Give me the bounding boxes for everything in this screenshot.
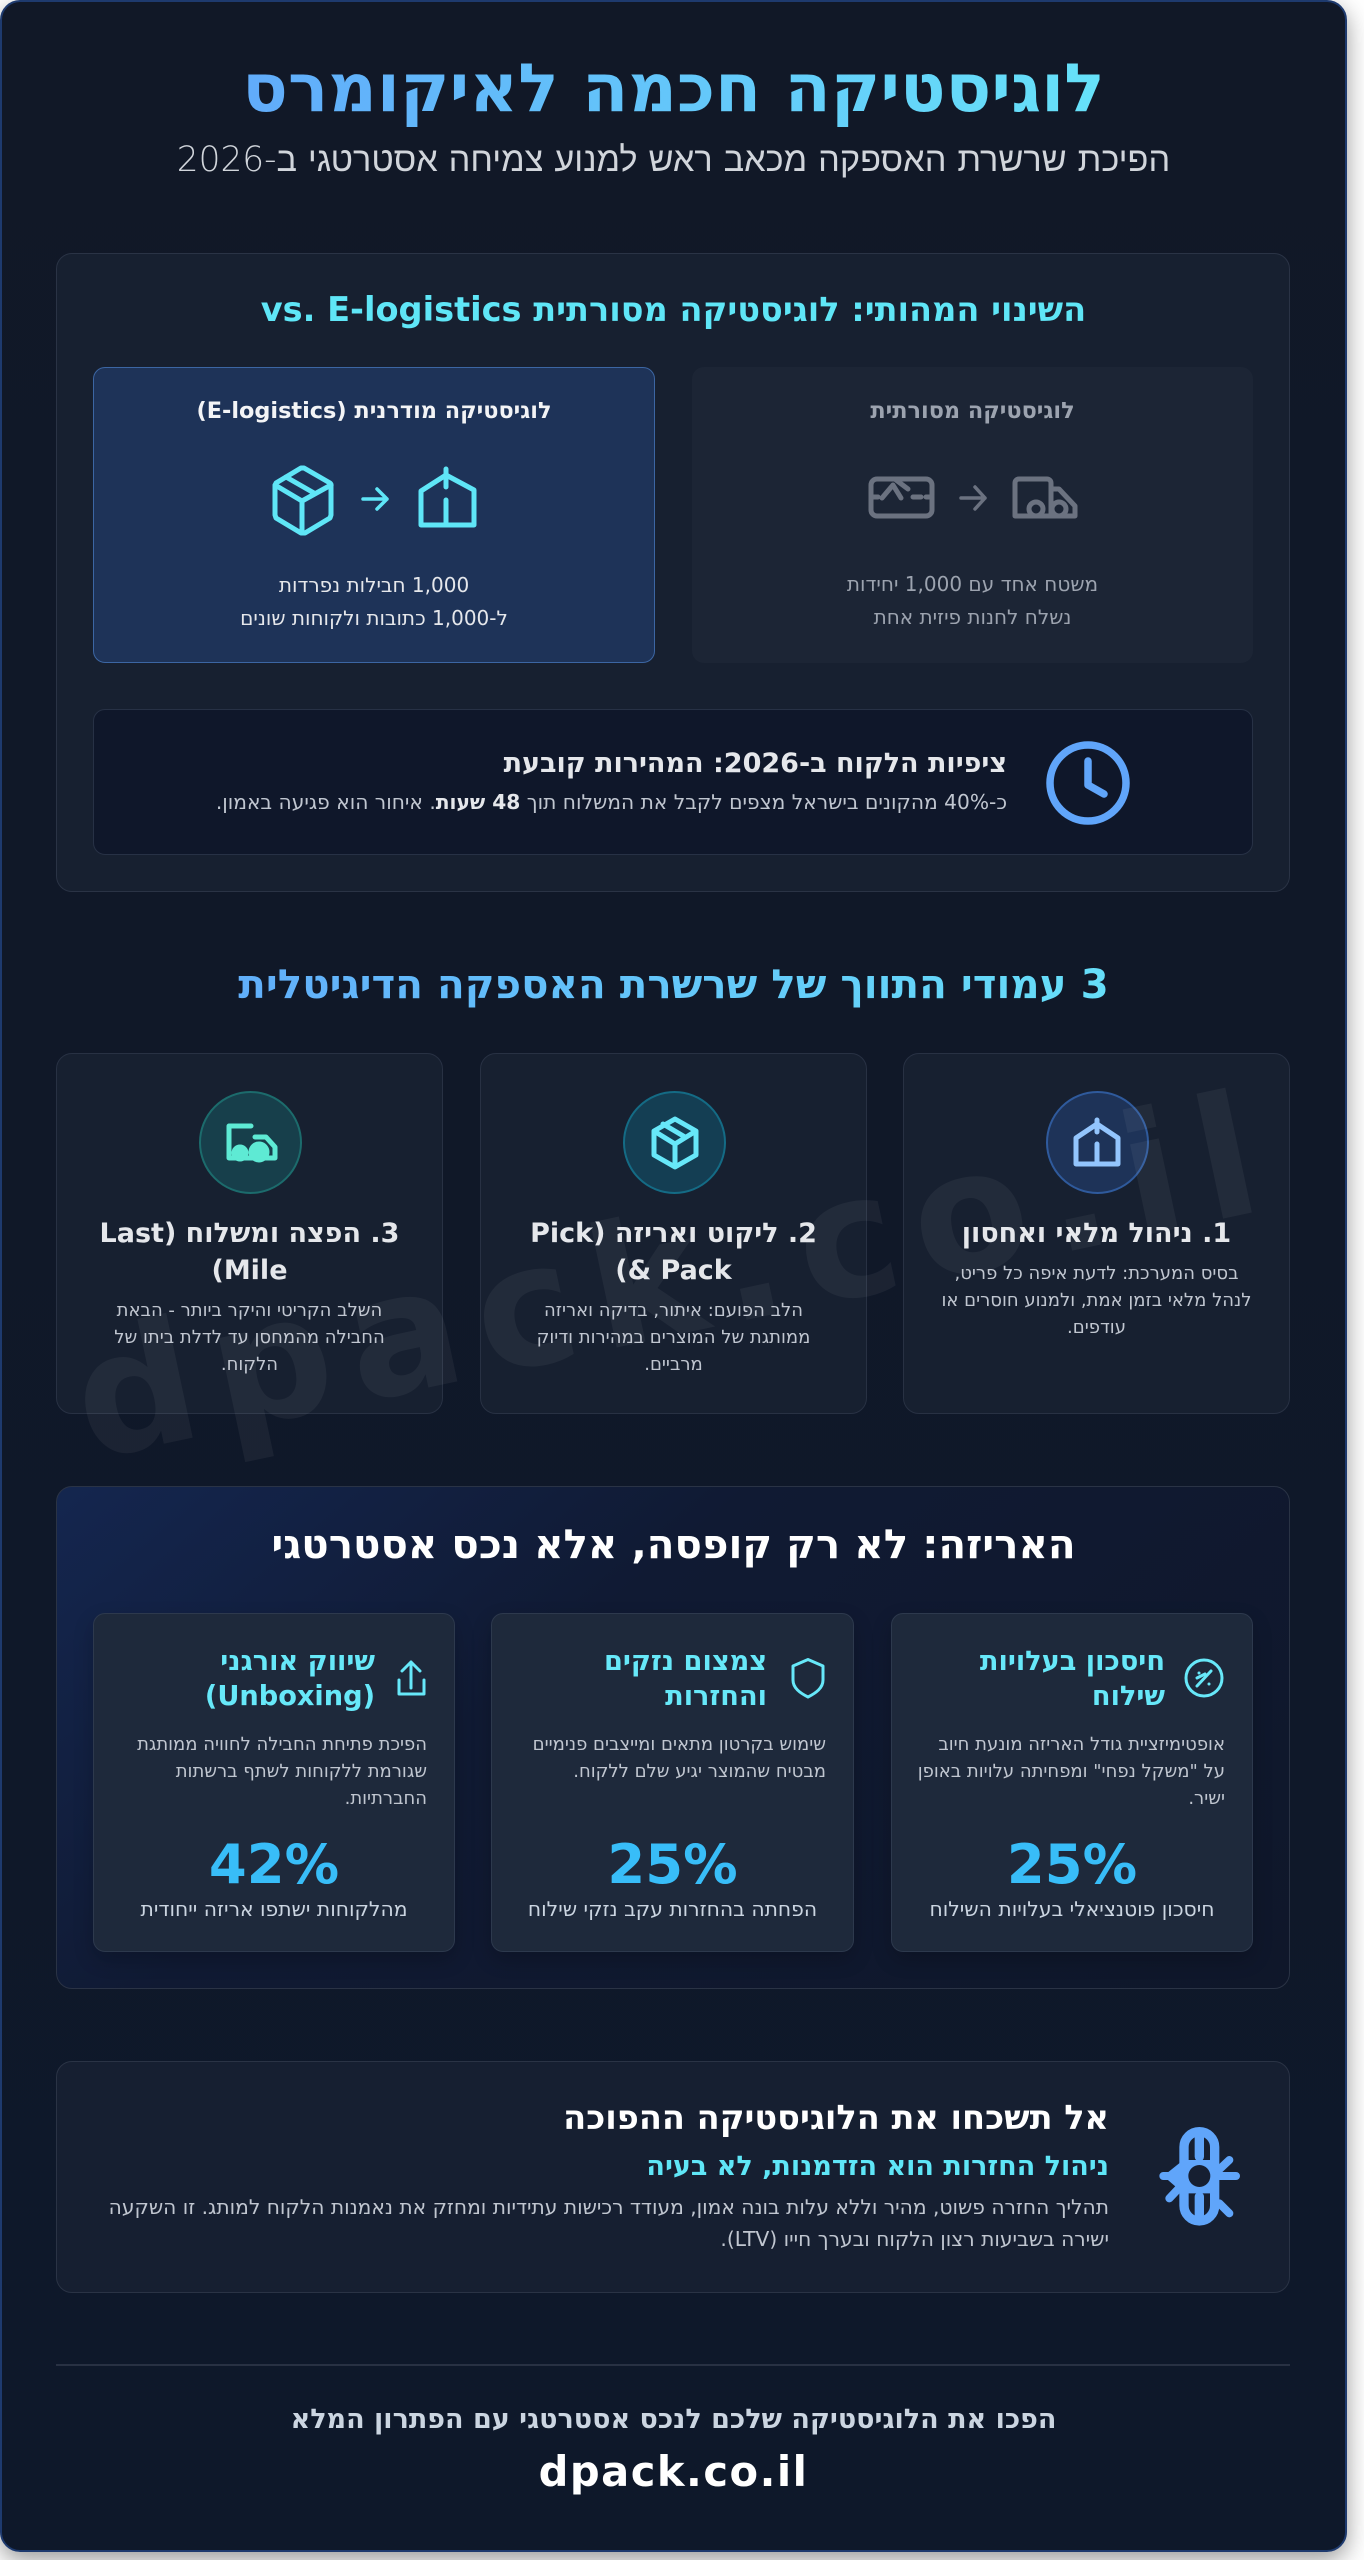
icon: returns emblem: [1159, 2127, 1240, 2226]
heading: three pillars: 3 עמודי התווך של שרשרת האספקה הדיגיטלית: [238, 960, 1109, 1008]
pillar 3 heading: 3. הפצה ומשלוח (Last Mile): [100, 1218, 399, 1286]
stat label: הפחתה בהחזרות עקב נזקי שילוח: [528, 1897, 817, 1921]
organic marketing heading: שיווק אורגני (Unboxing): [205, 1646, 375, 1712]
pillar 1: inventory: [903, 1053, 1290, 1414]
modern description: 1,000 חבילות נפרדות: [279, 573, 469, 597]
organic marketing text: הפיכת פתיחת החבילה לחוויה ממותגת שגורמת ללקוחות לשתף ברשתות החברתיות.: [137, 1734, 427, 1809]
card: shipping cost savings: [891, 1613, 1253, 1952]
title: [140, 42, 1207, 134]
card: damage reduction: [491, 1613, 854, 1952]
pillar 2 heading: 2. ליקוט ואריזה (Pick & Pack): [530, 1218, 817, 1286]
traditional icons: [868, 476, 1078, 518]
heading: packaging as asset: האריזה: לא רק קופסה, אלא נכס אסטרטגי: [271, 1520, 1076, 1568]
stat 25%: 25%: [1007, 1833, 1137, 1896]
reverse logistics subheading: ניהול החזרות הוא הזדמנות, לא בעיה: [646, 2151, 1109, 2182]
damage reduction text: שימוש בקרטון מתאים ומייצבים פנימיים מבטיח שהמוצר יגיע שלם ללקוח.: [533, 1734, 826, 1782]
heading: core change: השינוי המהותי: לוגיסטיקה מסורתית vs. E-logistics: [261, 290, 1086, 329]
panel: reverse logistics: [56, 2061, 1290, 2293]
reverse logistics heading: אל תשכחו את הלוגיסטיקה ההפוכה: [563, 2098, 1109, 2137]
modern title: לוגיסטיקה מודרנית (E-logistics): [196, 398, 552, 424]
pillar 3 text: השלב הקריטי והיקר ביותר - הבאת החבילה מהמחסן עד לדלת ביתו של הלקוח.: [114, 1300, 385, 1375]
pillar 2: pick and pack: [480, 1053, 867, 1414]
pillar 2 text: הלב הפועם: איתור, בדיקה ואריזה ממותגת של המוצרים במהירות ודיוק מרביים.: [537, 1300, 810, 1375]
stat label: חיסכון פוטנציאלי בעלויות השילוח: [929, 1897, 1215, 1921]
traditional description: משטח אחד עם 1,000 יחידות: [847, 572, 1098, 596]
icon: shield: [792, 1658, 824, 1698]
traditional description: נשלח לחנות פיזית אחת: [874, 605, 1071, 629]
footer divider: [56, 2364, 1290, 2366]
icon: clock: [1046, 741, 1130, 825]
heading: three pillars: [60, 956, 1287, 1012]
card: organic marketing: [93, 1613, 455, 1952]
icon: share: [398, 1660, 426, 1696]
watermark: dpack.co.il: [56, 1053, 1292, 1499]
stat 42%: 42%: [209, 1833, 339, 1896]
icon: package: [623, 1091, 726, 1194]
cost savings heading: חיסכון בעלויות שילוח: [980, 1646, 1165, 1712]
footer website: dpack.co.il: [539, 2447, 808, 2496]
callout heading: ציפיות הלקוח ב-2026: המהירות קובעת: [504, 748, 1007, 779]
footer call to action: הפכו את הלוגיסטיקה שלכם לנכס אסטרטגי עם הפתרון המלא: [291, 2404, 1056, 2435]
icon: percent badge: [1184, 1658, 1224, 1698]
modern description: [240, 573, 508, 630]
callout: customer expectations: [93, 709, 1253, 855]
callout body: כ-40% מהקונים בישראל מצפים לקבל את המשלוח תוך 48 שעות. איחור הוא פגיעה באמון.: [216, 790, 1007, 814]
traditional description: [847, 572, 1098, 629]
pillar 1 text: בסיס המערכת: לדעת איפה כל פריט, לנהל מלאי בזמן אמת, ולמנוע חוסרים או עודפים.: [942, 1263, 1252, 1338]
pillar 1 heading: 1. ניהול מלאי ואחסון: [962, 1218, 1231, 1249]
pillar 3: last mile: [56, 1053, 443, 1414]
cost savings text: אופטימיזציית גודל האריזה מונעת חיוב על "משקל נפחי" ומפחיתה עלויות באופן ישיר.: [918, 1734, 1225, 1809]
reverse logistics body: תהליך החזרה פשוט, מהיר וללא עלות בונה אמון, מעודד רכישות עתידיות ומחזק את נאמנות הלקוח למותג. זו השקעה ישירה בשביעות רצון הלקוח ובערך חייו (LTV).: [109, 2195, 1109, 2251]
title: לוגיסטיקה חכמה לאיקומרס: [242, 49, 1105, 127]
panel: traditional vs e-logistics: [56, 253, 1290, 892]
panel: traditional logistics: [692, 367, 1253, 663]
stat 25%: 25%: [607, 1833, 738, 1896]
panel: modern e-logistics: [93, 367, 655, 663]
traditional title: לוגיסטיקה מסורתית: [870, 398, 1075, 424]
icon: warehouse: [1046, 1091, 1149, 1194]
panel: packaging: [56, 1486, 1290, 1989]
damage reduction heading: צמצום נזקים והחזרות: [604, 1646, 767, 1712]
modern icons: [272, 466, 476, 536]
icon: delivery truck: [199, 1091, 302, 1194]
subtitle: הפיכת שרשרת האספקה מכאב ראש למנוע צמיחה אסטרטגי ב-2026: [177, 140, 1170, 180]
stat label: מהלקוחות ישתפו אריזה ייחודית: [141, 1897, 407, 1921]
modern description: ל-1,000 כתובות ולקוחות שונים: [240, 606, 508, 630]
